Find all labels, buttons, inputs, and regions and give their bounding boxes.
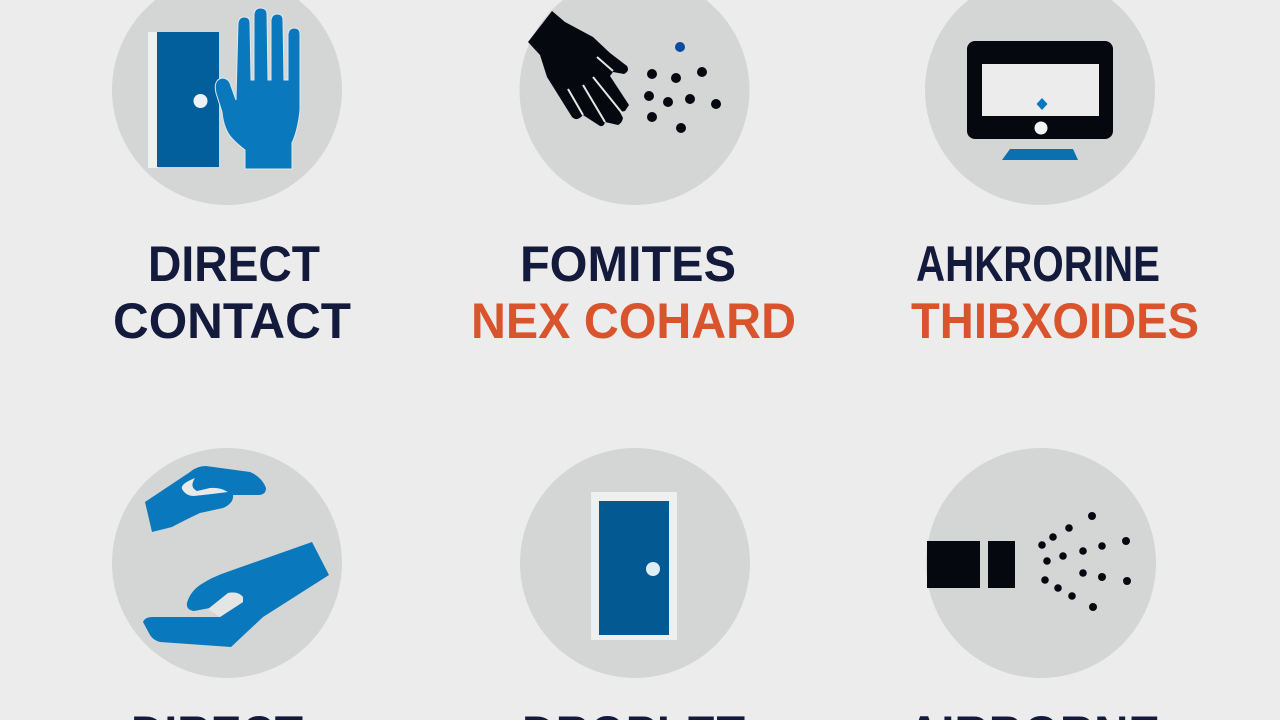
panel: airborne spray	[907, 448, 1160, 720]
label: direct contact	[113, 236, 351, 349]
label: airborne	[911, 236, 1199, 349]
panel: direct contact door and hand	[112, 0, 351, 349]
icon: upper hand	[145, 466, 266, 532]
icon: spray particles	[1038, 512, 1131, 611]
label: direct contact: CONTACT	[113, 293, 351, 349]
icon: circle background	[112, 0, 342, 205]
panel: droplet door	[520, 448, 750, 720]
icon: black hand	[528, 11, 629, 126]
icon: raised hand	[215, 8, 300, 169]
icon: black blocks	[927, 541, 1015, 588]
panel: fomites hand and particles	[471, 0, 796, 349]
panel: airborne monitor	[911, 0, 1199, 349]
icon: door	[148, 32, 219, 168]
label: airborne: THIBXOIDES	[911, 293, 1199, 349]
icon: circle background	[926, 448, 1156, 678]
label: fomites: NEX COHARD	[471, 293, 796, 349]
icon: circle background	[520, 0, 750, 205]
icon: circle background	[925, 0, 1155, 205]
label: direct contact: DIRECT	[148, 236, 320, 292]
label: fomites: FOMITES	[520, 236, 736, 292]
icon: door	[591, 492, 677, 640]
label: airborne: AHKRORINE	[916, 236, 1160, 292]
icon: particles	[644, 42, 721, 133]
icon: circle background	[520, 448, 750, 678]
icon: circle background	[112, 448, 342, 678]
icon: monitor	[967, 41, 1113, 160]
panel: direct hands	[112, 448, 342, 720]
icon: lower hand	[143, 542, 329, 647]
label: fomites	[471, 236, 796, 349]
